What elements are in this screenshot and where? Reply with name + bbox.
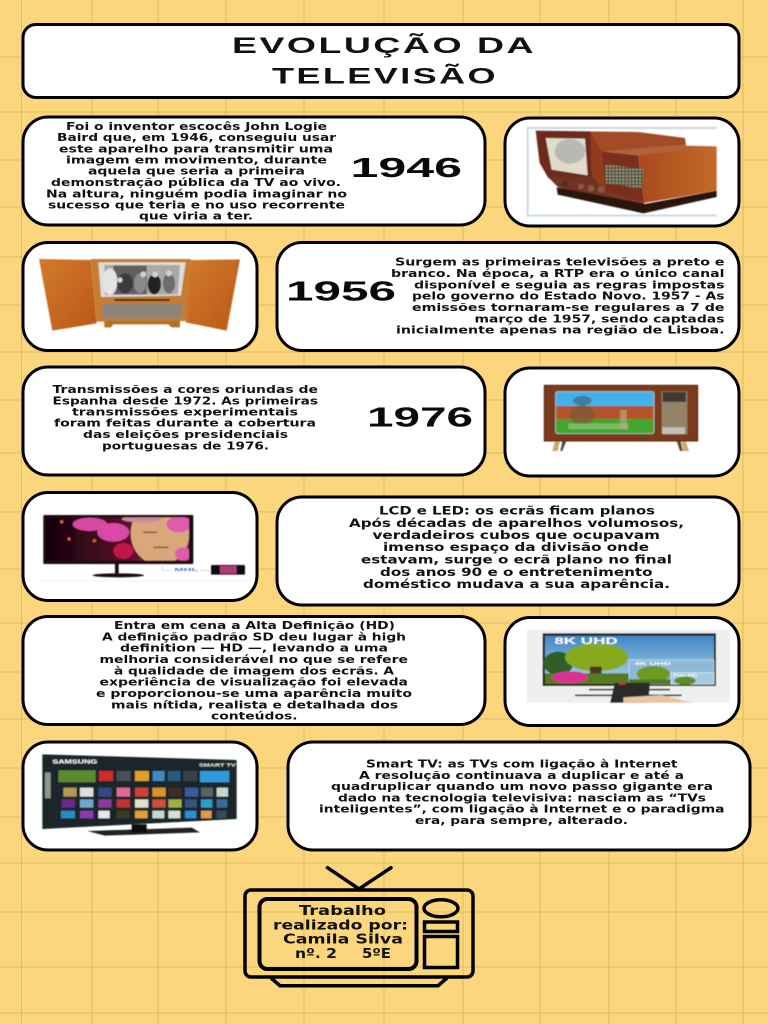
- credit text: [273, 904, 408, 962]
- text block: Smart TV: era, para sempre, alterado.: [415, 814, 628, 827]
- credit text: Camila Silva: [283, 933, 403, 948]
- title: [232, 33, 536, 88]
- panel: 1976 image: [505, 368, 739, 476]
- panel: Smart TV text: [288, 742, 750, 850]
- text block: 1976: das eleições presidenciais: [83, 428, 289, 441]
- text block: 1946: [46, 120, 348, 223]
- text block: 1956: inicialmente apenas na região de Lisboa.: [396, 324, 724, 337]
- text block: 1956: emissões tornaram-se regulares a 7 de: [412, 301, 724, 314]
- text block: 1946: aquela que seria a primeira: [88, 165, 305, 178]
- text block: 1956: [391, 256, 725, 337]
- text block: Alta Definição: à qualidade de imagem dos ecrãs. A: [114, 664, 395, 677]
- text block: 1956: Surgem as primeiras televisões a preto e: [395, 256, 724, 269]
- text block: 1976: foram feitas durante a cobertura: [54, 417, 316, 430]
- icon: 8K UHD television with remote: [527, 630, 730, 703]
- credit text: realizado por:: [273, 918, 408, 933]
- panel: HD text: [23, 616, 485, 724]
- text block: Smart TV: inteligentes”, com ligação à Internet e o paradigma: [319, 803, 724, 816]
- panel: LCD text: [277, 497, 739, 605]
- year: 1946: 1946: [350, 152, 462, 183]
- icon: 8K UHD television with remote: Full HD: [673, 674, 698, 678]
- text block: 1976: Transmissões a cores oriundas de: [52, 383, 318, 396]
- text block: LCD e LED: LCD e LED: os ecrãs ficam planos: [379, 504, 655, 518]
- text block: Smart TV: [319, 758, 724, 827]
- text block: 1946: que viria a ter.: [139, 210, 253, 223]
- icon: 1976 colour television: [544, 385, 698, 451]
- text block: LCD e LED: imenso espaço da divisão onde: [383, 540, 649, 554]
- text block: Smart TV: A resolução continuava a duplicar e até a: [359, 769, 684, 782]
- text block: 1956: branco. Na época, a RTP era o único canal: [391, 267, 724, 280]
- icon: television credit frame: [245, 868, 473, 986]
- text block: 1946: este aparelho para transmitir uma: [59, 142, 333, 155]
- text block: 1976: portuguesas de 1976.: [102, 439, 269, 452]
- text block: Smart TV: dado na tecnologia televisiva: nasciam as “TVs: [338, 791, 707, 804]
- text block: Alta Definição: Entra em cena a Alta Definição (HD): [114, 619, 395, 632]
- year: 1956: 1956: [286, 276, 396, 307]
- panel: 1976 text: [23, 367, 485, 475]
- panel: 1956 text: [277, 242, 739, 350]
- text block: LCD e LED: Após décadas de aparelhos volumosos,: [349, 516, 684, 530]
- text block: 1976: Espanha desde 1972. As primeiras: [52, 394, 319, 407]
- icon: flat LCD monitor and phone: MHL: [174, 567, 198, 573]
- icon: Samsung smart TV: [42, 754, 237, 836]
- text block: Alta Definição: experiência de visualização foi elevada: [100, 676, 408, 689]
- title: TELEVISÃO: [272, 64, 498, 88]
- credit text: Trabalho: [299, 904, 386, 919]
- icon: Samsung smart TV: SMART TV: [199, 763, 237, 769]
- panel: 1946 text: [23, 117, 485, 225]
- text block: 1946: Baird que, em 1946, conseguiu usar: [57, 131, 337, 144]
- text block: LCD e LED: verdadeiros cubos que ocupavam: [372, 528, 660, 542]
- credit text: 5ºE: [362, 947, 391, 962]
- icon: 8K UHD television with remote: 8K UHD: [554, 636, 619, 646]
- panel: 1946 image: [505, 118, 739, 226]
- panel: LCD image: [23, 492, 257, 600]
- text block: LCD e LED: dos anos 90 e o entretenimento: [380, 565, 653, 579]
- text block: Smart TV: quadruplicar quando um novo passo gigante era: [331, 780, 713, 793]
- text block: 1956: disponível e seguia as regras impostas: [414, 278, 725, 291]
- credit text: nº. 2: [295, 947, 337, 962]
- text block: LCD e LED: estavam, surge o ecrã plano no final: [361, 552, 672, 566]
- icon: Samsung smart TV: SAMSUNG: [52, 759, 97, 765]
- text block: 1976: transmissões experimentais: [72, 405, 299, 418]
- text block: 1946: sucesso que teria e no uso recorrente: [48, 198, 345, 211]
- text block: 1956: março de 1957, sendo captadas: [474, 312, 725, 325]
- text block: 1946: Na altura, ninguém podia imaginar no: [46, 187, 348, 200]
- title: EVOLUÇÃO DA: [232, 33, 536, 58]
- icon: flat LCD monitor and phone: [42, 514, 246, 578]
- year: 1976: 1976: [367, 402, 473, 433]
- panel: title: [23, 24, 739, 98]
- text block: Smart TV: Smart TV: as TVs com ligação à Internet: [366, 758, 678, 771]
- text block: LCD e LED: [349, 504, 684, 591]
- text block: Alta Definição: [96, 619, 413, 723]
- panel: 1956 image: [23, 242, 257, 350]
- text block: Alta Definição: melhoria considerável no que se refere: [100, 653, 408, 666]
- icon: 1956 cabinet television: [39, 259, 240, 331]
- text block: 1976: [52, 383, 319, 452]
- text block: 1946: demonstração pública da TV ao vivo.: [51, 176, 341, 189]
- text block: Alta Definição: mais nítida, realista e detalhada dos: [111, 698, 399, 711]
- icon: 1946 wooden television: [528, 128, 717, 216]
- text block: LCD e LED: doméstico mudava a sua aparência.: [363, 577, 670, 591]
- text block: 1946: Foi o inventor escocês John Logie: [66, 120, 327, 133]
- text block: Alta Definição: conteúdos.: [211, 710, 298, 723]
- text block: Alta Definição: e proporcionou-se uma aparência muito: [96, 687, 413, 700]
- text block: 1946: imagem em movimento, durante: [66, 154, 327, 167]
- icon: 8K UHD television with remote: 4K UHD: [634, 661, 672, 667]
- panel: HD image: [505, 618, 739, 726]
- text block: Alta Definição: definition — HD —, levando a uma: [120, 642, 388, 655]
- panel: Smart TV image: [23, 742, 257, 850]
- text block: Alta Definição: A definição padrão SD deu lugar à high: [102, 630, 406, 643]
- text block: 1956: pelo governo do Estado Novo. 1957 - As: [412, 290, 725, 303]
